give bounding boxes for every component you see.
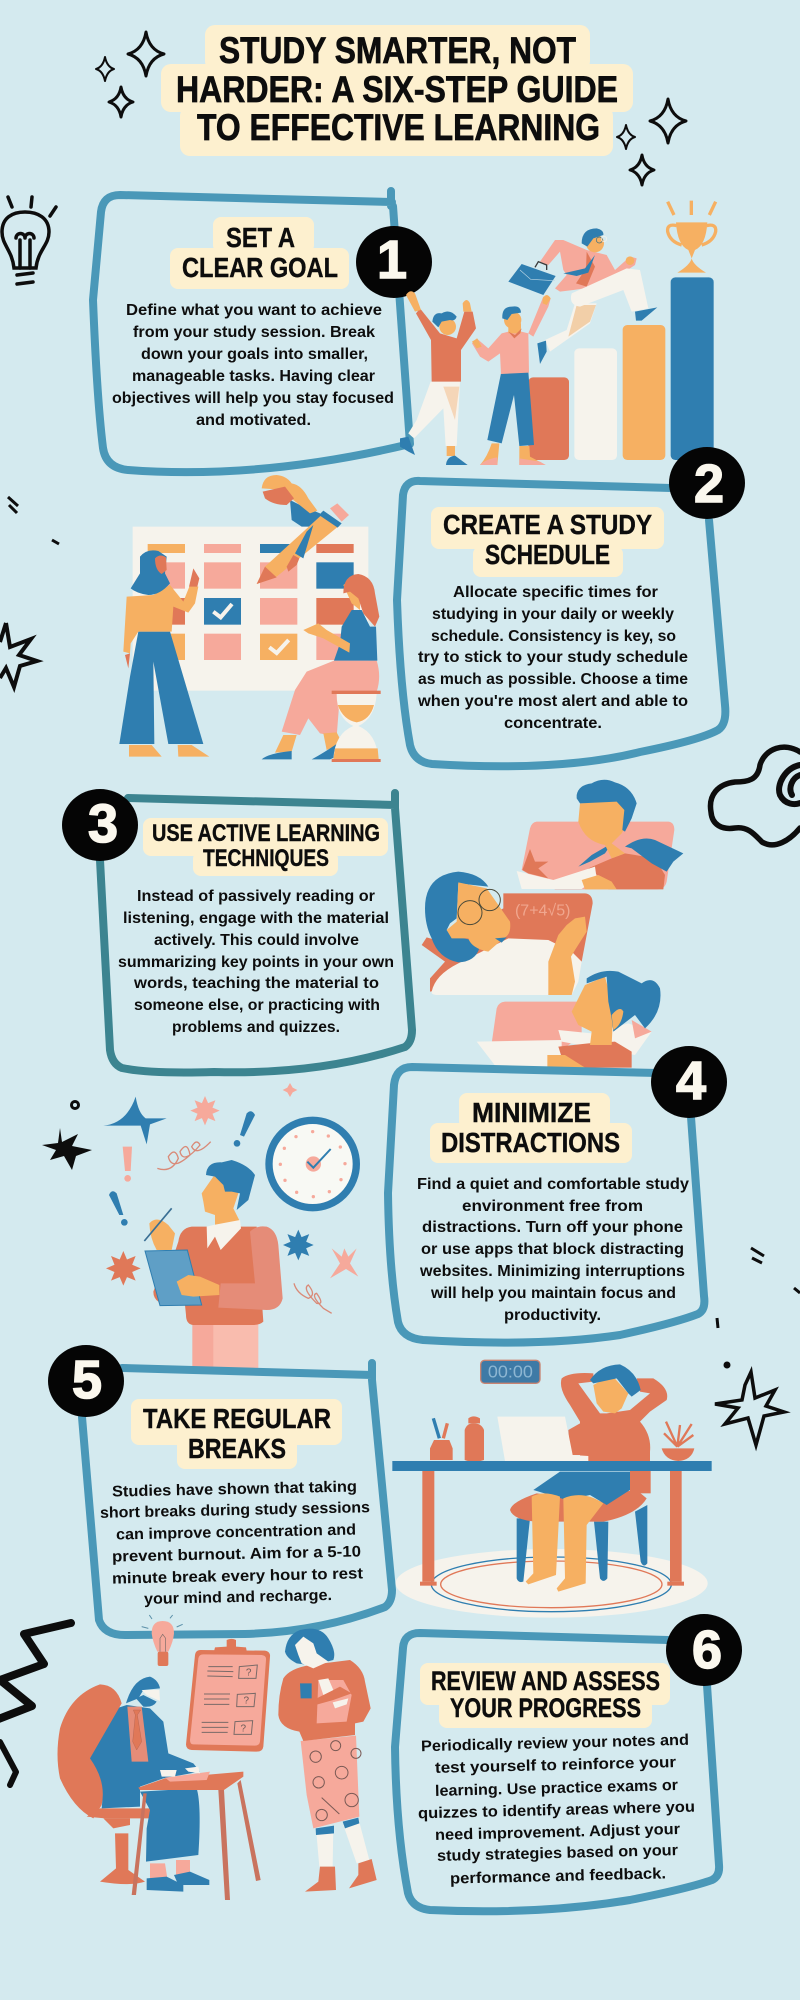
text block: step 2 body: as much as possible. Choose a time [418, 671, 688, 688]
title: TO EFFECTIVE LEARNING [197, 107, 600, 148]
text block: step 6 body: Periodically review your notes and [421, 1732, 689, 1755]
title: HARDER: A SIX-STEP GUIDE [176, 69, 618, 110]
decorative stars and exclamation marks [103, 1083, 358, 1313]
doodle: black star and dot right [715, 1362, 784, 1445]
icon: clipboard checklist [186, 1639, 270, 1752]
heading: take regular breaks: TAKE REGULAR [143, 1403, 331, 1434]
text block: step 1 body: and motivated. [196, 412, 311, 429]
doodle: black squiggle left [0, 1623, 71, 1785]
figure: woman on pencil [257, 475, 349, 584]
illustration: man at desk and woman with clipboard [57, 1615, 377, 1900]
figure: man at desk [57, 1677, 209, 1892]
icon: sparkles left [96, 32, 164, 117]
figure: standing woman in hijab [119, 550, 209, 757]
text block: step 5 body: prevent burnout. Aim for a 5-10 [112, 1543, 361, 1566]
text block: step 1 body: from your study session. Break [133, 324, 375, 341]
heading: minimize distractions [430, 1093, 632, 1163]
icon: clipboard checklist: ? [241, 1723, 247, 1734]
number badge 3 [62, 789, 138, 861]
icon: light bulb doodle [2, 197, 56, 284]
icon: pink light bulb [142, 1615, 183, 1666]
illustration: team climbing bar chart to trophy [400, 201, 716, 465]
text block: step 6 body: need improvement. Adjust your [435, 1821, 680, 1844]
icon: clock [269, 1120, 356, 1208]
icon: clipboard checklist: ? [246, 1668, 252, 1679]
figure: girl with glasses and chalkboard [422, 872, 593, 995]
illustration: team planning on calendar [119, 475, 381, 762]
text block: step 3 body: words, teaching the material to [133, 975, 379, 992]
figure: seated woman [262, 574, 381, 762]
number badge 5 [48, 1345, 124, 1417]
text block: step 6 body: test yourself to reinforce your [435, 1754, 676, 1777]
number badge 4: 4 [676, 1051, 706, 1111]
heading: use active learning techniques: USE ACTIVE LEARNING [152, 820, 380, 847]
text block: step 4 body: environment free from [462, 1198, 643, 1215]
text block: step 2 body [417, 584, 688, 732]
text block: step 3 body: someone else, or practicing with [134, 997, 380, 1014]
text block: step 4 body: Find a quiet and comfortable study [417, 1176, 689, 1193]
panel: step 3 use active learning techniques [62, 789, 412, 1072]
illustration: man thinking with clipboard and clock [103, 1083, 358, 1368]
text block: step 5 body: short breaks during study sessions [100, 1499, 370, 1522]
text block: step 2 body: concentrate. [504, 715, 602, 732]
number badge 4 [651, 1046, 727, 1118]
doodle marks and stars left [0, 497, 59, 687]
text block: step 1 body: down your goals into smaller, [141, 346, 368, 363]
text block: step 2 body: try to stick to your study schedule [418, 649, 688, 666]
text block: step 2 body: Allocate specific times for [453, 584, 658, 601]
icon: timer [481, 1360, 540, 1383]
text block: step 3 body: Instead of passively reading or [137, 888, 375, 905]
doodle marks right [717, 1248, 800, 1328]
heading: use active learning techniques [143, 818, 388, 876]
rug [396, 1549, 708, 1618]
calendar grid [133, 527, 368, 691]
heading: review and assess your progress: REVIEW AND ASSESS [431, 1666, 660, 1696]
text block: step 5 body: minute break every hour to rest [112, 1565, 363, 1588]
title [161, 25, 633, 156]
heading: take regular breaks [131, 1399, 342, 1469]
text block: step 6 body: quizzes to identify areas where you [418, 1799, 695, 1822]
heading: take regular breaks: BREAKS [188, 1433, 286, 1464]
text block: step 6 body: learning. Use practice exams or [435, 1777, 678, 1800]
icon: trophy [668, 201, 716, 273]
number badge 2: 2 [694, 454, 724, 514]
bar chart columns [528, 277, 714, 460]
heading: review and assess your progress: YOUR PROGRESS [450, 1693, 641, 1723]
text block: step 3 body: actively. This could involve [154, 932, 359, 949]
figure: leaping person with briefcase [508, 228, 657, 364]
figure: middle person [472, 295, 551, 465]
text block: step 2 body: when you're most alert and able to [417, 693, 688, 710]
text block: step 5 body: can improve concentration and [116, 1521, 356, 1544]
text block: step 1 body: objectives will help you stay focused [112, 390, 394, 407]
heading: create a study schedule [431, 507, 664, 577]
number badge 1 [356, 226, 432, 298]
panel: step 4 minimize distractions [388, 1046, 727, 1343]
icon: hourglass [332, 691, 381, 762]
figure: thinking man [144, 1160, 283, 1368]
heading: create a study schedule: CREATE A STUDY [443, 509, 652, 540]
number badge 1: 1 [377, 230, 407, 290]
figure: top student reading [517, 780, 683, 889]
text block: step 5 body: your mind and recharge. [144, 1587, 332, 1608]
heading: use active learning techniques: TECHNIQUES [203, 845, 329, 872]
number badge 6 [666, 1614, 742, 1686]
text block: step 1 body: Define what you want to achieve [126, 302, 382, 319]
text block: step 6 body: performance and feedback. [450, 1865, 666, 1888]
desk [132, 1767, 261, 1900]
heading: create a study schedule: SCHEDULE [485, 539, 610, 570]
title: STUDY SMARTER, NOT [219, 30, 576, 71]
panel: step 5 take regular breaks [48, 1345, 392, 1635]
figure: left person [400, 291, 476, 465]
figure: woman with book [278, 1629, 377, 1892]
heading: set a clear goal: CLEAR GOAL [182, 252, 338, 283]
text block: step 3 body: summarizing key points in your own [118, 954, 394, 971]
text block: step 3 body: listening, engage with the material [123, 910, 389, 927]
text block: step 2 body: schedule. Consistency is key, so [431, 628, 676, 645]
text block: step 2 body: studying in your daily or weekly [432, 606, 674, 623]
figure: girl with glasses and chalkboard: (7+4√5) [515, 903, 570, 920]
text block: step 4 body: distractions. Turn off your phone [422, 1219, 683, 1236]
icon: clipboard checklist: ? [244, 1696, 250, 1707]
desk and items [392, 1416, 712, 1586]
text block: step 4 body: will help you maintain focus and [430, 1285, 676, 1302]
heading: review and assess your progress [420, 1663, 670, 1728]
text block: step 4 body: websites. Minimizing interruptions [419, 1263, 685, 1280]
illustration: man relaxing at desk [392, 1360, 712, 1618]
illustration: students learning together [422, 780, 683, 1068]
number badge 5: 5 [72, 1350, 102, 1410]
text block: step 3 body [118, 888, 394, 1036]
heading: set a clear goal: SET A [226, 222, 295, 253]
text block: step 4 body: productivity. [504, 1307, 601, 1324]
panel: step 6 review and assess your progress [395, 1614, 742, 1911]
doodle: cloud scribble right [710, 747, 800, 845]
text block: step 4 body [417, 1176, 689, 1324]
figure: relaxing man [510, 1364, 667, 1592]
text block: step 1 body: manageable tasks. Having clear [132, 368, 375, 385]
text block: step 5 body: Studies have shown that taking [112, 1478, 357, 1501]
number badge 3: 3 [88, 794, 118, 854]
text block: step 5 body [100, 1478, 370, 1608]
number badge 2 [669, 447, 745, 519]
text block: step 3 body: problems and quizzes. [172, 1019, 340, 1036]
number badge 6: 6 [692, 1620, 722, 1680]
text block: step 4 body: or use apps that block distracting [421, 1241, 684, 1258]
panel: step 1 set a clear goal [93, 191, 432, 472]
icon: timer: 00:00 [488, 1362, 533, 1382]
figure: bottom student [477, 971, 661, 1068]
text block: step 1 body [112, 302, 394, 429]
text block: step 6 body: study strategies based on your [437, 1842, 678, 1865]
heading: set a clear goal [170, 217, 349, 289]
heading: minimize distractions: MINIMIZE [472, 1097, 591, 1128]
panel: step 2 create a study schedule [397, 447, 745, 766]
doodle: black star and dot left [42, 1102, 92, 1170]
icon: sparkles right [617, 99, 686, 185]
text block: step 6 body [418, 1732, 695, 1888]
heading: minimize distractions: DISTRACTIONS [441, 1127, 620, 1158]
